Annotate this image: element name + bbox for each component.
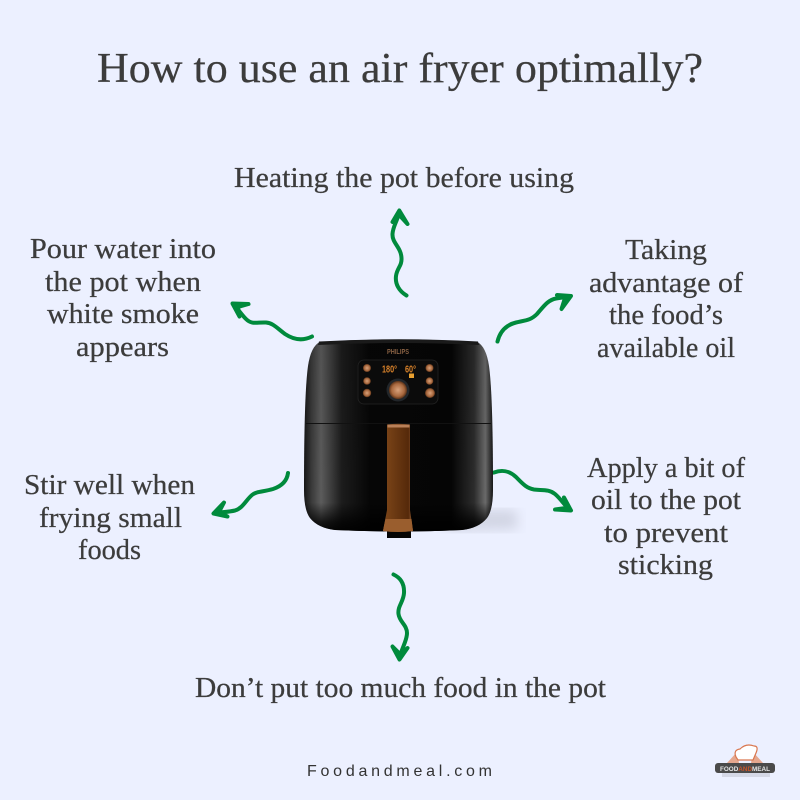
fryer body — [304, 340, 493, 532]
arrow: lower right — [494, 471, 571, 510]
handle — [383, 424, 413, 532]
label: food's available oil: advantage of — [589, 267, 743, 299]
label: apply oil — [587, 452, 745, 581]
label: food's available oil — [589, 234, 743, 364]
arrow: lower left — [214, 473, 288, 516]
arrow: upper right — [498, 295, 571, 342]
label: pour water: the pot when — [45, 266, 202, 298]
fryer shadow — [440, 510, 518, 531]
display icon — [409, 374, 414, 378]
logo: badge — [715, 763, 775, 773]
logo: badge text: FOODANDMEAL — [720, 766, 770, 773]
label: pour water — [30, 233, 216, 363]
label: apply oil: Apply a bit of — [587, 452, 745, 484]
label: apply oil: to prevent — [604, 517, 728, 549]
label: pour water: white smoke — [47, 298, 199, 330]
label: apply oil: sticking — [618, 549, 713, 581]
fryer body shading — [304, 340, 493, 532]
arrow: down — [392, 574, 408, 660]
display readouts: 180° — [382, 364, 397, 376]
label: stir well — [24, 469, 195, 566]
illustration: air fryer — [304, 339, 518, 538]
label: don't overfill: Don’t put too much food in the pot — [195, 672, 606, 704]
label: stir well: frying small — [39, 502, 182, 534]
label: food's available oil: the food’s — [609, 299, 723, 331]
logo — [715, 745, 775, 777]
label: stir well: foods — [78, 534, 141, 566]
website: Foodandmeal.com — [307, 763, 492, 780]
label: heating the pot: Heating the pot before using — [234, 162, 574, 194]
arrow: upper left — [232, 304, 312, 339]
lid rim — [318, 339, 479, 345]
label: pour water: Pour water into — [30, 233, 216, 265]
label: pour water: appears — [76, 331, 169, 363]
handle foot — [387, 528, 411, 538]
brand name: PHILIPS — [387, 349, 409, 356]
logo: badge shadow — [722, 772, 770, 777]
buttons — [363, 364, 435, 398]
label: stir well: Stir well when — [24, 469, 195, 501]
label: apply oil: oil to the pot — [591, 484, 741, 516]
logo: wings — [727, 752, 763, 763]
display readouts: 60° — [405, 364, 416, 376]
handle lower band — [383, 519, 413, 532]
label: food's available oil: available oil — [597, 332, 735, 364]
label: food's available oil: Taking — [625, 234, 707, 266]
handle top highlight — [388, 424, 410, 428]
dial — [386, 378, 410, 402]
logo: chef hat — [735, 745, 757, 760]
display readouts — [382, 364, 416, 376]
arrow: up — [392, 210, 408, 296]
control panel — [358, 360, 438, 404]
title: How to use an air fryer optimally? — [97, 46, 703, 92]
seam — [306, 422, 491, 424]
